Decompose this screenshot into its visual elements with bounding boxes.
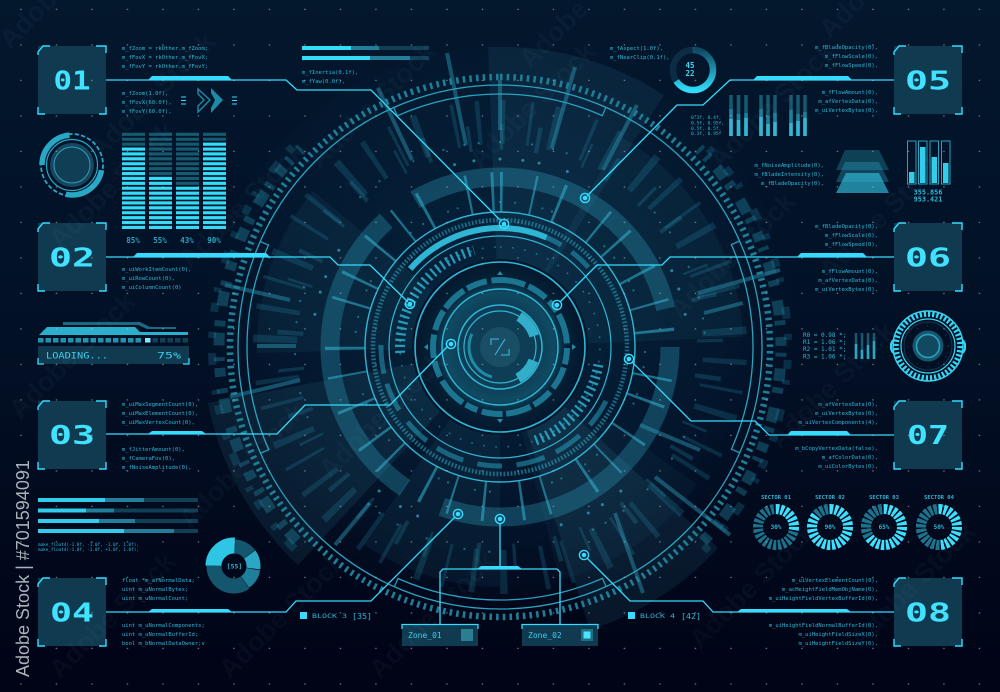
code text 04: float *m_afNormalData;: [122, 578, 195, 584]
long radial bars: [225, 53, 780, 593]
noise text: m_fBladeOpacity(0),: [761, 181, 824, 187]
top progress bars: [302, 46, 429, 60]
code text 06: m_fFlowAmount(0),: [822, 269, 878, 275]
watermarks: Adobe Stock: [43, 546, 182, 684]
meter values: 355.856: [914, 188, 942, 196]
bar chart labels: 85%: [126, 236, 140, 245]
code text 05: [815, 45, 878, 114]
small bars group top right: [731, 95, 805, 136]
noise text: [754, 163, 824, 187]
code text 07: m_bCopyVertexData(false),: [795, 446, 878, 452]
number box 08: 08: [905, 598, 951, 628]
background glow: [200, 47, 800, 647]
meter bars: [908, 141, 950, 184]
donut 45 22: 22: [685, 69, 695, 78]
code text 01: [122, 46, 208, 115]
watermarks: Adobe Stock: [763, 316, 902, 454]
R values: R3 = 1.06 *;: [803, 354, 846, 360]
code text 05: m_fFlowSpeed(0),: [825, 63, 878, 69]
sector gauge 04: SECTOR 04: [924, 495, 955, 501]
zone 02: [522, 624, 598, 646]
small float text: 0.5f, 0.5f,: [691, 126, 721, 132]
connector zones: [440, 524, 560, 624]
code text 08: m_uiHeightFieldNormalBufferId(0),: [769, 623, 878, 629]
connector nodes: [405, 193, 634, 560]
code text 08: m_uiVertexElementCount(0),: [792, 578, 878, 584]
block 3 label: [35]: [352, 612, 372, 621]
watermarks: Adobe Stock: [83, 26, 222, 164]
connector 01: [105, 76, 500, 220]
sector gauge 02: SECTOR 02: [815, 495, 845, 501]
watermarks: Adobe Stock: [213, 546, 352, 684]
sector gauge 01: [758, 495, 794, 545]
code text 04: uint m_uNormalBytes;: [122, 587, 188, 593]
code text 06: m_afVertexData(0),: [818, 278, 878, 284]
side bursts: [208, 144, 792, 554]
code text 01: m_fZoom = rkOther.m_fZoom;: [122, 46, 208, 52]
top text right: [610, 46, 670, 61]
small bars R: [856, 333, 874, 359]
watermarks: Adobe Stock: [463, 36, 602, 174]
number box 05: 05: [905, 66, 951, 96]
number box 01: [38, 46, 106, 114]
code text 05: m_fFlowAmount(0),: [822, 90, 878, 96]
code text 05: m_afVertexData(0),: [818, 99, 878, 105]
code text 08: m_acHeightFieldMemObjName(0),: [782, 587, 878, 593]
code text 05: m_fBladeOpacity(0),: [815, 45, 878, 51]
ring markers: [424, 271, 576, 423]
number box 04: 04: [50, 598, 94, 628]
number box 05: [894, 46, 962, 114]
connector 06: [560, 253, 894, 302]
code text 06: m_fFlowSpeed(0),: [825, 242, 878, 248]
stock id text: Adobe Stock | #701594091: [13, 460, 33, 677]
top text right: m_fAspect(1.0f),: [610, 46, 663, 52]
number box 01: 01: [54, 66, 90, 96]
zone 02: Zone_02: [528, 631, 562, 640]
sector gauge 03: SECTOR 03: [869, 495, 899, 501]
make float text: make_float4(-1.0f, -1.0f, -1.0f, 1.0f),: [38, 542, 139, 548]
watermarks: Adobe Stock: [703, 36, 842, 174]
small float text: [691, 115, 724, 137]
bar chart labels: 55%: [153, 236, 167, 245]
code text 03: m_uiMaxElementCount(0),: [122, 411, 198, 417]
number box 08: [894, 578, 962, 646]
number box 06: [894, 223, 962, 291]
code text 01: m_fFovX = rkOther.m_fFovX;: [122, 55, 208, 61]
center icon: [480, 327, 520, 367]
zone 01: [402, 624, 478, 646]
sector gauge 04: 50%: [934, 524, 945, 531]
connector 07: [632, 362, 894, 435]
sector gauge 01: SECTOR 01: [761, 495, 792, 501]
center disc: [412, 259, 588, 435]
watermarks: Adobe Stock: [43, 116, 182, 254]
code text 03: m_fNoiseAmplitude(0),: [122, 465, 192, 471]
number box 02: 02: [49, 244, 95, 274]
meter values: [914, 188, 942, 204]
watermarks: Adobe Stock: [173, 396, 312, 534]
small float text: 0.3f, 0.4f,: [691, 115, 721, 121]
connector 02: [105, 253, 408, 302]
make float text: make_float4(-1.0f, -1.0f, +1.0f, 1.0f),: [38, 547, 139, 553]
code text 04: bool m_bNormalDataOwner;v: [122, 641, 205, 647]
small float text: 0.5f, 0.95f,: [691, 120, 724, 126]
bar chart labels: 43%: [180, 236, 194, 245]
faint outer sectors: [208, 47, 743, 630]
code text 07: m_uiVertexBytes(0),: [815, 411, 878, 417]
code text 08: m_uiHeightFieldVertexBufferId(0),: [769, 596, 878, 602]
code text 01: m_fFovX(60.0f),: [122, 100, 172, 106]
connector 08: [587, 558, 894, 612]
bar chart levels: [134, 132, 214, 229]
watermarks: Adobe Stock: [843, 516, 982, 654]
loading panel: LOADING...: [46, 352, 108, 362]
block 3 label: BLOCK 3: [312, 612, 347, 620]
number box 03: [38, 401, 106, 469]
bar chart labels: [126, 236, 221, 245]
code text 06: m_fFlowScale(0),: [825, 233, 878, 239]
zone 01: Zone_01: [408, 631, 442, 640]
number box 04: [38, 578, 106, 646]
top text left: m_fYaw(0.0f),: [302, 79, 345, 85]
code text 03: m_uiMaxVertexCount(0),: [122, 420, 195, 426]
sector gauge 02: [812, 495, 848, 545]
code text 07: [795, 402, 878, 470]
code text 03: m_fJitterAmount(0),: [122, 447, 185, 453]
number box 07: [894, 401, 962, 469]
meter values: 953.421: [914, 196, 942, 204]
block 4 label: BLOCK 4: [640, 612, 675, 620]
watermarks: Adobe Stock: [3, 286, 142, 424]
outer rings with brackets: [238, 85, 762, 609]
code text 03: [122, 402, 198, 471]
R values: R2 = 1.01 *;: [803, 346, 846, 353]
sector gauge 04: [921, 495, 957, 545]
code text 02: m_uiWorkItemCount(0),: [122, 267, 192, 273]
code text 07: m_uiVertexComponents(4),: [799, 420, 878, 426]
code text 04: uint m_uNormalComponents;: [122, 623, 205, 629]
watermarks: Adobe Stock: [683, 516, 822, 654]
code text 05: m_uiVertexBytes(0),: [815, 108, 878, 114]
donut 45 22: 45: [685, 61, 695, 70]
watermarks: Adobe Stock: [663, 186, 802, 324]
small float text: 0.3f, 0.95f: [691, 131, 722, 137]
top text left: m_fInertia(0.1f),: [302, 70, 358, 76]
code text 04: uint m_uNormalCount;: [122, 596, 188, 602]
code text 07: m_afColorData(0),: [822, 455, 878, 461]
code text 01: m_fZoom(1.0f),: [122, 91, 168, 97]
connector 03: [105, 346, 448, 434]
code text 03: m_uiMaxSegmentCount(0),: [122, 402, 198, 408]
number box 03: 03: [49, 421, 95, 451]
code text 08: [769, 578, 878, 647]
sector gauge 02: 90%: [825, 524, 836, 531]
R values: R1 = 1.06 *;: [803, 339, 846, 346]
radial bars: [275, 122, 725, 572]
hud radial core: [200, 47, 800, 647]
sector gauge 03: [866, 495, 902, 545]
icon: chevrons: [181, 88, 237, 113]
number box 07: 07: [907, 421, 949, 451]
dial 06: [891, 311, 965, 381]
watermarks: Adobe Stock: [173, 136, 312, 274]
gauge 01: [41, 134, 103, 196]
top text right: m_fNearClip(0.1f),: [610, 55, 670, 61]
watermarks: Adobe Stock: [313, 346, 452, 484]
block 3 label: [300, 612, 372, 621]
code text 06: m_uiVertexBytes(0),: [815, 287, 878, 293]
inner tick arcs: [400, 247, 600, 447]
noise text: m_fNoiseAmplitude(0),: [754, 163, 824, 169]
code text 04: [122, 578, 205, 647]
progress bars left: [38, 498, 198, 533]
code text 06: m_fBladeOpacity(0),: [815, 224, 878, 230]
code text 02: [122, 267, 192, 291]
donut 55: [55]: [227, 562, 242, 570]
code text 03: m_fCameraFov(0),: [122, 456, 175, 462]
layer stack icon: [836, 150, 889, 193]
block 4 label: [628, 612, 701, 621]
donut 55: [214, 546, 254, 586]
noise text: m_fBladeIntensity(0),: [754, 172, 824, 178]
R values: [803, 332, 846, 360]
number box 02: [38, 223, 106, 291]
R values: R0 = 0.98 *;: [803, 332, 846, 339]
donut 45 22: [673, 50, 713, 90]
watermarks: Adobe Stock: [303, 36, 442, 174]
top text left: [302, 70, 358, 85]
watermarks: Adobe Stock: [363, 546, 502, 684]
code text 07: m_uiColorBytes(0),: [818, 464, 878, 470]
loading panel: [38, 322, 189, 364]
sector gauge 03: 65%: [879, 524, 890, 531]
connector 04: [105, 517, 455, 612]
watermarks: Adobe Stock: [813, 146, 952, 284]
code text 02: m_uiColumnCount(0): [122, 285, 182, 291]
number box 06: 06: [905, 244, 951, 274]
loading panel: 75%: [157, 352, 181, 362]
block 4 label: [42]: [681, 612, 701, 621]
make float text: [38, 542, 139, 553]
code text 01: m_fFovY(60.0f),: [122, 109, 172, 115]
code text 05: m_fFlowScale(0),: [825, 54, 878, 60]
code text 02: m_uiRowCount(0),: [122, 276, 175, 282]
code text 01: m_fFovY = rkOther.m_fFovY;: [122, 64, 208, 70]
bar chart labels: 90%: [207, 236, 221, 245]
code text 08: m_uiHeightFieldSizeY(0),: [799, 641, 878, 647]
thick band arcs: [330, 177, 670, 517]
connector 05: [587, 76, 894, 196]
sector gauge 01: 30%: [771, 524, 782, 531]
inner rings: [365, 212, 635, 482]
outer ticks: [230, 77, 770, 617]
code text 04: uint m_uNormalBufferId;: [122, 632, 198, 638]
code text 08: m_uiHeightFieldSizeX(0),: [799, 632, 878, 638]
code text 07: m_afVertexData(0),: [818, 402, 878, 408]
code text 06: [815, 224, 878, 293]
